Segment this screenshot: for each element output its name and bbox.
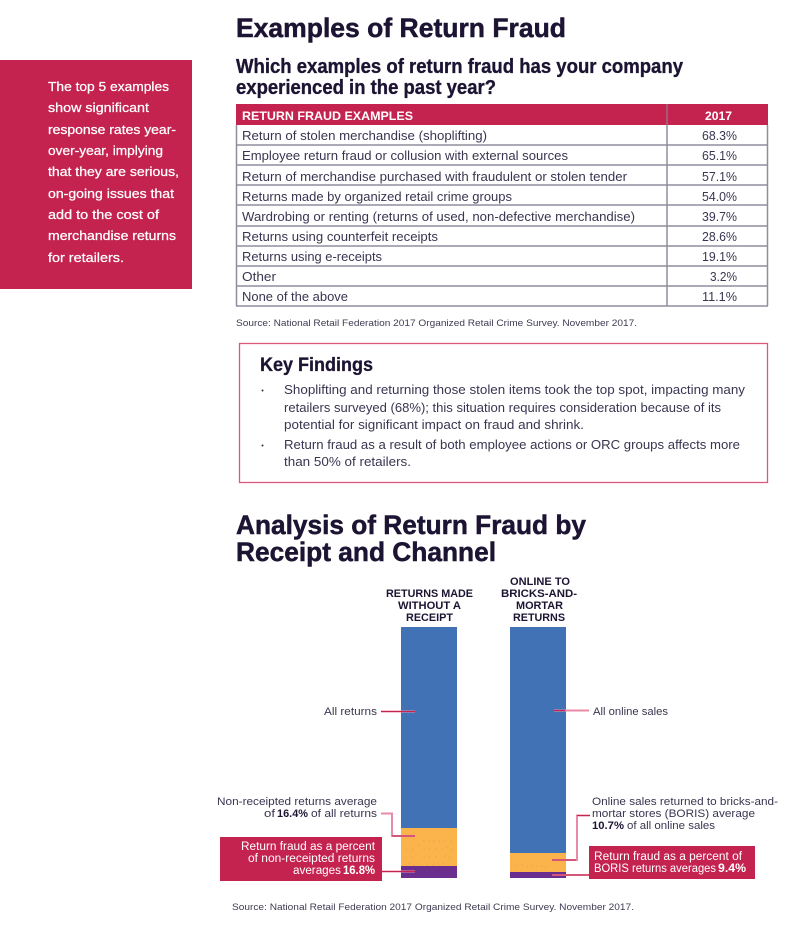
finding 2: than 50% of retailers. [284,455,411,469]
title: Examples of Return Fraud: Examples of Return Fraud [236,13,566,43]
column heading: ONLINE TO [510,576,570,588]
source note: chart: Source: National Retail Federation 2017 Organized Retail Crime Survey. November 2017. [232,902,634,913]
column heading: BRICKS-AND- [501,588,577,600]
chart: online to bricks-and-mortar returns [501,576,778,879]
subheading: survey question: experienced in the past year? [236,77,496,99]
label: non-receipted returns: of [264,808,276,820]
key findings heading: Key Findings [260,355,373,376]
table rows: 54.0% [702,190,737,204]
callout: return fraud BORIS: Return fraud as a percent of [594,851,743,863]
stacked bar [510,627,566,878]
column heading: WITHOUT A [398,600,461,612]
callout: return fraud BORIS: 9.4% [718,863,746,875]
callout: return fraud BORIS [552,846,755,879]
table rows: 28.6% [702,230,737,244]
column heading: RETURNS MADE [386,588,473,600]
label: all online sales [554,706,669,718]
table rows: None of the above [242,290,348,304]
column heading: MORTAR [516,600,563,612]
chart: returns made without a receipt [217,588,473,881]
label: all returns: All returns [324,706,378,718]
heading: Analysis of Return Fraud: Analysis of Return Fraud by [236,510,586,540]
finding 1 [262,383,746,432]
label: all online sales: All online sales [593,706,669,718]
label: BORIS online sales [552,796,778,860]
panel: sidebar callout: The top 5 examples [48,79,170,94]
panel: sidebar callout: response rates year- [48,122,176,137]
label: non-receipted returns [217,796,415,836]
table rows: 65.1% [702,149,737,163]
table header row: 2017 [705,109,732,123]
finding 2: Return fraud as a result of both employee actions or ORC groups affects more [284,438,740,452]
table rows [242,129,737,304]
callout: return fraud non-receipted: 16.8% [343,865,375,877]
table rows: 57.1% [702,170,737,184]
heading: Analysis of Return Fraud: Receipt and Channel [236,537,496,567]
label: BORIS online sales: Online sales returned to bricks-and- [592,796,778,808]
label: non-receipted returns: Non-receipted returns average [217,796,377,808]
panel: sidebar callout: over-year, implying [48,143,163,158]
table rows: Return of merchandise purchased with fraudulent or stolen tender [242,170,627,184]
table rows: Returns using counterfeit receipts [242,230,438,244]
table rows: 3.2% [710,270,737,284]
source note: table: Source: National Retail Federation 2017 Organized Retail Crime Survey. November 2017. [236,318,637,329]
label: BORIS online sales: mortar stores (BORIS) average [592,808,755,820]
label: BORIS online sales: 10.7% [592,820,624,832]
table rows: Returns using e-receipts [242,250,382,264]
callout: return fraud non-receipted [220,837,415,881]
finding 1: Shoplifting and returning those stolen items took the top spot, impacting many [284,383,746,397]
table rows: 19.1% [702,250,737,264]
panel: sidebar callout: add to the cost of [48,207,159,222]
column heading: RETURNS [513,612,565,624]
label: non-receipted returns: of all returns [311,808,378,820]
panel: sidebar callout: show significant [48,100,149,115]
table rows: Employee return fraud or collusion with external sources [242,149,568,163]
table rows: Wardrobing or renting (returns of used, non-defective merchandise) [242,210,635,224]
panel: key findings [240,344,768,482]
subheading: survey question [236,56,684,99]
stacked bar [401,627,457,878]
table rows: 39.7% [702,210,737,224]
table header row [236,104,768,125]
finding 2 [262,438,740,469]
table header row: RETURN FRAUD EXAMPLES [242,109,413,123]
panel: sidebar callout: for retailers. [48,250,124,265]
finding 1: potential for significant impact on fraud and shrink. [284,418,584,432]
table rows: Other [242,270,276,284]
label: BORIS online sales: of all online sales [627,820,716,832]
panel: sidebar callout: merchandise returns [48,228,177,243]
subheading: survey question: Which examples of return fraud has your company [236,56,684,78]
column heading [501,576,577,624]
table: return fraud examples [236,104,768,306]
callout: return fraud non-receipted: of non-receipted returns [248,853,375,865]
finding 1: retailers surveyed (68%); this situation requires consideration because of its [284,401,721,415]
column heading: RECEIPT [406,612,453,624]
label: all returns [324,706,415,718]
panel: sidebar callout: on-going issues that [48,186,174,201]
callout: return fraud non-receipted: averages [293,865,341,877]
callout: return fraud non-receipted: Return fraud as a percent [241,841,376,853]
panel: sidebar callout [0,60,192,289]
table rows: 11.1% [702,290,737,304]
table rows: 68.3% [702,129,737,143]
callout: return fraud BORIS: BORIS returns averages [594,863,716,875]
column heading [386,588,473,624]
panel: sidebar callout: that they are serious, [48,164,179,179]
heading: Analysis of Return Fraud [236,510,586,567]
table rows: Return of stolen merchandise (shoplifting) [242,129,487,143]
table rows: Returns made by organized retail crime groups [242,190,512,204]
label: non-receipted returns: 16.4% [277,808,308,820]
